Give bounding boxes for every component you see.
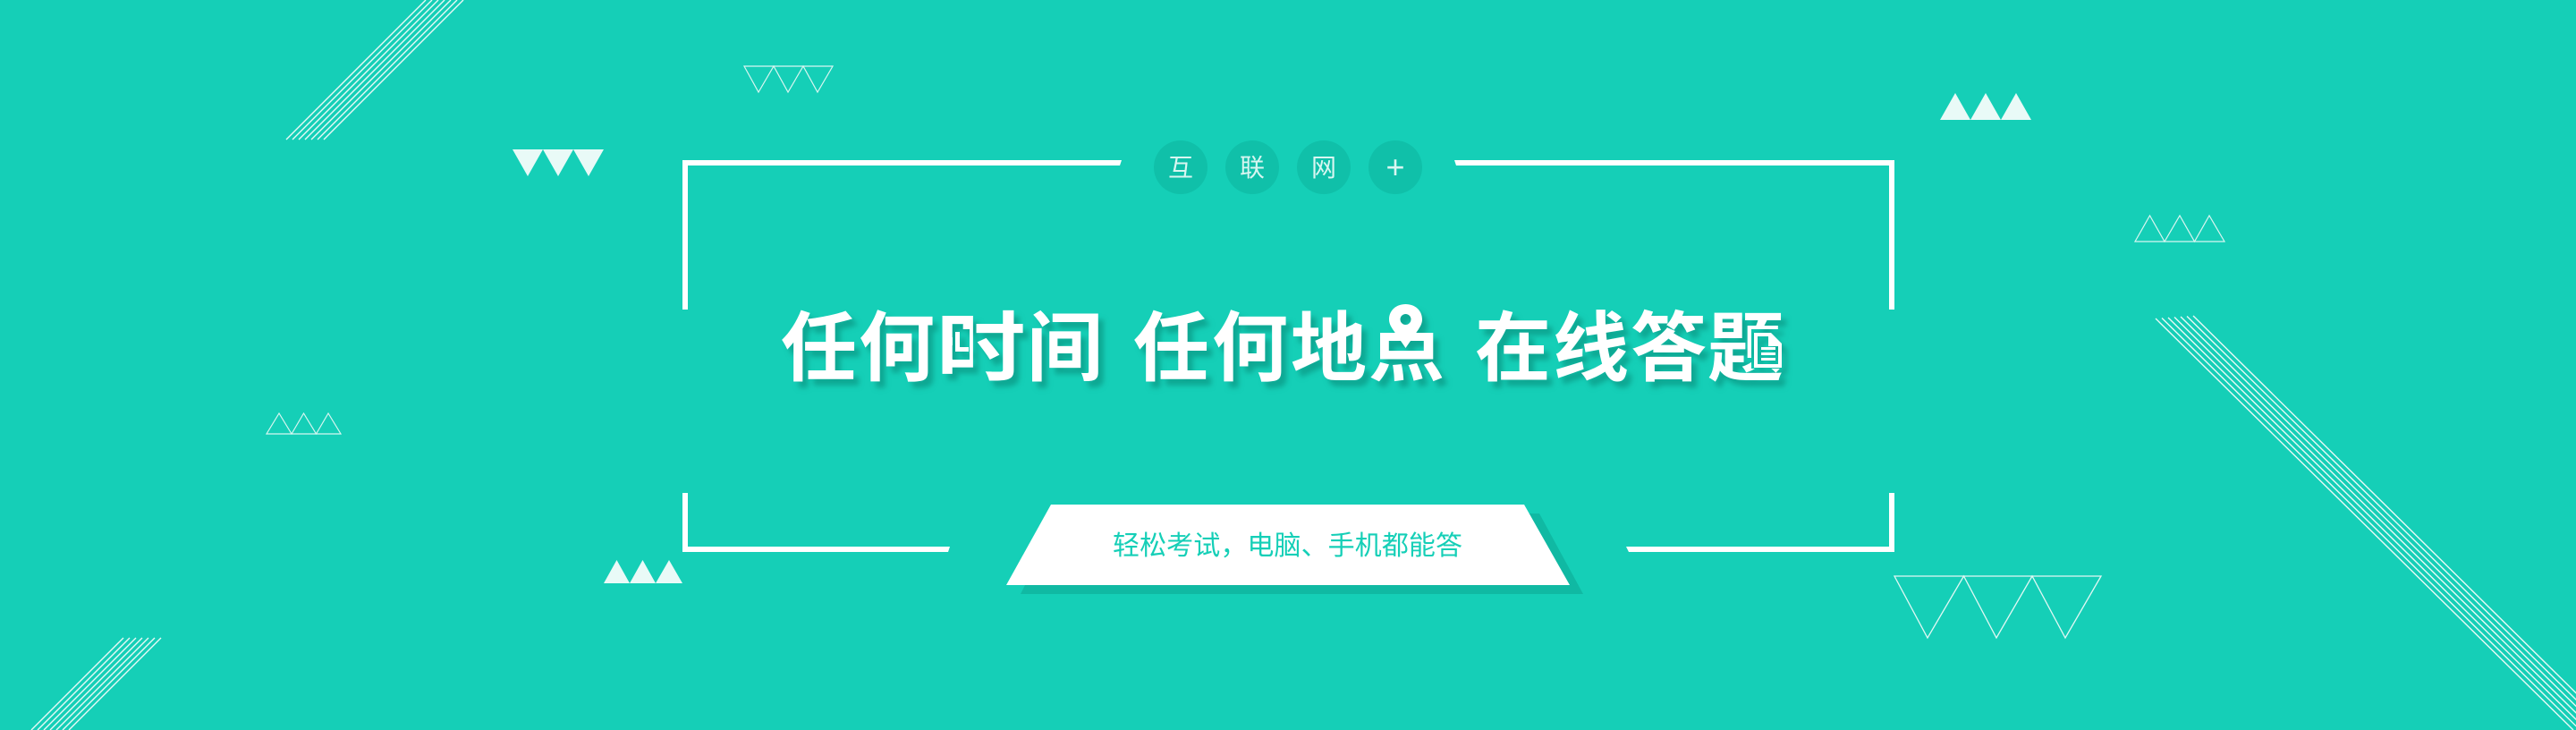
circle: 联 — [1225, 140, 1279, 194]
ribbon shadow — [1021, 514, 1583, 594]
title glyph: 时: 时 — [936, 306, 1025, 391]
title part: 任何地: 何 — [1212, 307, 1288, 392]
icon: clock hands — [955, 332, 969, 352]
icon: document — [1754, 333, 1782, 368]
circle: 联: 联 — [1240, 154, 1265, 182]
outline triangles: right — [2135, 216, 2224, 242]
subtitle ribbon — [1006, 505, 1583, 594]
diagonal lines: top left — [286, 0, 463, 140]
title part: 在线答: 线 — [1553, 307, 1629, 392]
circle: 网 — [1297, 140, 1351, 194]
circle: plus — [1368, 140, 1422, 194]
title part: 任何地: 任 — [1133, 307, 1209, 392]
title part: 间: 间 — [1027, 307, 1103, 392]
title part: 在线答: 答 — [1631, 307, 1707, 392]
frame: bottom right corner — [1626, 493, 1894, 552]
circle: 网: 网 — [1311, 154, 1336, 182]
outline triangles: top — [744, 66, 833, 92]
title part: 任何: 任 — [781, 307, 857, 392]
tag circles — [1154, 140, 1422, 194]
frame: bottom left corner — [682, 493, 950, 552]
title glyph: 题 with clipped corner: 题 — [1707, 307, 1784, 392]
diagonal lines: bottom left — [31, 638, 161, 730]
outline triangles: left — [267, 413, 341, 434]
title glyph: 点 with clipped top: 点 — [1368, 307, 1445, 392]
title — [781, 304, 1784, 392]
ribbon body — [1006, 505, 1570, 585]
frame: top left corner — [682, 160, 1122, 310]
diagonal lines: right — [2156, 316, 2576, 730]
circle: 互 — [1154, 140, 1208, 194]
title part: 任何: 何 — [859, 307, 935, 392]
title part: 在线答: 在 — [1475, 307, 1551, 392]
frame: top right corner — [1454, 160, 1894, 310]
title part: 任何地: 地 — [1291, 307, 1367, 392]
icon: location pin — [1389, 304, 1422, 348]
solid triangles: top left — [513, 149, 604, 176]
circle: 互: 互 — [1168, 154, 1193, 182]
outline triangles: large bottom right — [1894, 576, 2101, 638]
solid triangles: top right — [1940, 93, 2031, 120]
solid triangles: bottom left — [604, 560, 682, 583]
subtitle text: 轻松考试，电脑、手机都能答 — [1113, 531, 1462, 561]
circle: plus: + — [1385, 149, 1405, 185]
